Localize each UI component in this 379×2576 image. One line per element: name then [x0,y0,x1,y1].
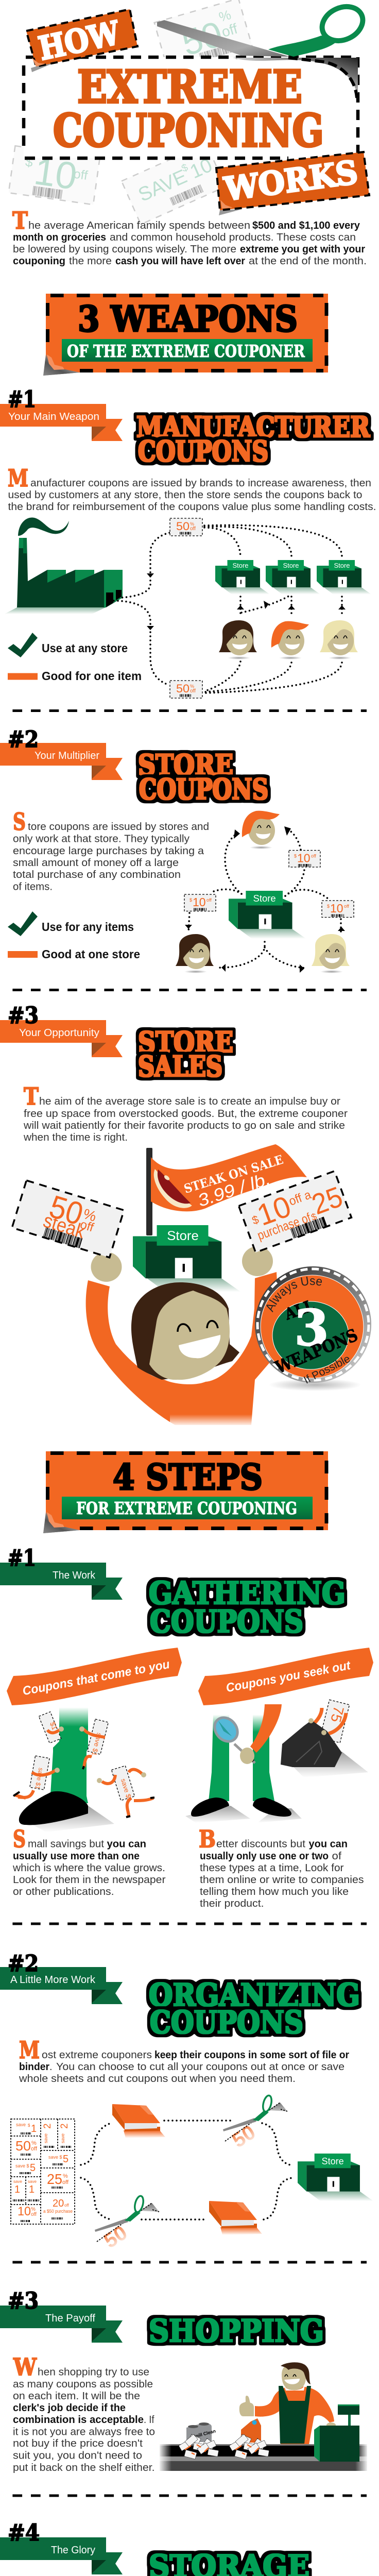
faint coupon: $10 off: off [73,167,89,183]
faint coupon: $10 off: 10 [31,149,79,198]
coupon: $10 off right: $ [327,904,330,909]
feature: use at any store [8,633,128,657]
text: organizing: . [49,2061,53,2073]
head [131,1282,239,1380]
coupon sheet: 1 [29,2184,35,2195]
coupon sheet: 5 [63,2154,68,2165]
coupon: 50% off bottom: 50 [176,682,190,695]
heading: manufacturer coupons: COUPONS [138,434,268,468]
flag: steak on sale [151,1144,307,1211]
diagram: organizing flow [81,2095,373,2253]
coupon: 50% off top: % [190,521,194,527]
coupon: $10 off: off [311,853,316,858]
coupon sheet: % [31,2207,36,2212]
text: shopping: not buy if the price doesn't [13,2438,143,2449]
clerk [239,2362,336,2445]
coupon sheet: 5 [30,2162,36,2174]
text: store coupons: encourage large purchases by taking a [13,845,204,857]
carton and coupons [229,2418,269,2459]
store: Store [167,1229,199,1243]
intro text: cash you will have left over [115,256,245,267]
text: better discounts: of [332,1851,341,1862]
text: manufacturer coupons [8,464,376,513]
coupon sheet: off [64,2203,70,2208]
heading: organizing coupons: ORGANIZING [149,1977,360,2013]
coupon sheet: 50 [15,2138,31,2154]
store 1 [215,560,270,595]
text: manufacturer coupons: M [8,464,28,492]
title panel: dashed coupon [24,57,358,158]
store: Store [253,893,276,904]
coupon runners [13,1711,154,1817]
coupon sheet: a $50 purchase [43,2209,73,2214]
coupon sheet: $ [28,2123,30,2128]
coupon sheet: save $ [15,2163,29,2168]
coupon: $10 off left: 10 [193,895,206,909]
coupon: $10 off left: $ [190,897,192,903]
ribbon: #1 the work [0,1545,123,1600]
title: COUPONING: COUPONING [53,104,324,157]
ribbon: #2 a little more work: A Little More Work [10,1974,96,1986]
banner: coupons you seek out: Coupons you seek out [225,1658,352,1695]
banner: 3 weapons: 3 WEAPONS [78,299,298,340]
text: manufacturer coupons: used by customers at any store, then the store sends the coupons back to [8,489,363,501]
coupon sheet: 10 [18,2205,31,2218]
text: store sales: will wait patiently for their favorite products to go on sale and strike [23,1120,345,1131]
coupon: 50% off bottom: % [190,684,194,689]
coupon: $10 off left: off [206,897,212,903]
coupon sheet: save [16,2122,26,2127]
coupon: $10 off [289,850,320,867]
title tag: WORKS: WORKS [222,154,360,208]
text: organizing: binder [19,2061,49,2073]
diagram: store coupon flow [176,811,354,973]
text: store coupons: total purchase of any combination [13,869,181,880]
text: better discounts: etter discounts but [216,1838,305,1850]
text: store sales [23,1082,348,1143]
text: small savings: Look for them in the newspaper [13,1874,166,1886]
text: organizing: You can choose to cut all your coupons out at once or save [56,2061,344,2073]
illustration: couponer with store and sale flag [11,1144,371,1425]
coupon sheet: 2 [42,2123,53,2129]
heading: store coupons: COUPONS [139,772,268,806]
banner: coupons that come to you [7,1648,182,1705]
faint coupon: $10 off [9,146,100,205]
text: small savings: usually use more than one [13,1851,140,1862]
text: shopping: on each item. It will be the [13,2391,140,2402]
coupon: 50% off steak: steak [41,1210,88,1243]
coupon sheet: 25 [47,2171,62,2187]
coupon: 50% off top: 50 [176,520,190,533]
shopper faces [219,620,358,659]
coupon sheet: save [60,2133,65,2143]
text: store coupons: of items. [13,881,53,892]
ribbon: #2 a little more work: #2 [8,1951,39,1977]
text: shopping: clerk's job decide if the [13,2402,126,2414]
banner: 4 steps: 4 STEPS [113,1457,263,1498]
conveyor [159,2444,368,2471]
icon: scissors cutting coupon [223,2095,287,2153]
icon: binder lower [209,2201,262,2235]
text: small savings: you can [107,1838,146,1850]
text: shopping: W [13,2353,37,2381]
flag: steak on sale: STEAK ON SALE [182,1152,285,1196]
coupon: $10 off right: 10 [330,902,343,915]
coupon: $10 off a purchase of $25: $ [310,1211,318,1223]
coupon sheet: off [31,2146,38,2152]
faint coupon: 50% off [154,0,254,76]
banner: coupons that come to you: Coupons that come to you [22,1657,171,1698]
intro text: extreme you get with your [240,244,365,255]
text: better discounts: you can [309,1838,348,1850]
badge: always use all 3 weapons if possible: Always Use [266,1277,322,1313]
text: manufacturer coupons: anufacturer coupons are issued by brands to increase awareness, then [30,478,371,489]
store: Store [322,2156,344,2166]
intro text: month on groceries [13,232,106,243]
feature: use at any store: Use at any store [42,641,128,655]
coupon sheet: save [43,2133,48,2143]
coupon: 50% off steak: 50 [45,1189,87,1232]
text: better discounts: these types at a time, Look for [200,1862,344,1874]
illustration: cashier at checkout [159,2362,368,2471]
text: store sales: when the time is right. [23,1132,128,1143]
coupon: $10 off a purchase of $25 [239,1171,351,1252]
coupon: $10 off a purchase of $25: purchase of [255,1210,313,1243]
intro text [12,207,367,267]
coupon: 50% off steak [12,1180,124,1258]
text: small savings: or other publications. [13,1886,114,1897]
banner: 3 weapons: OF THE EXTREME COUPONER [67,341,305,361]
ribbon: #4 the glory [0,2520,123,2574]
heading: gathering coupons: COUPONS [150,1604,303,1640]
ribbon: #1 your main weapon [0,386,123,441]
intro text: couponing [13,256,65,267]
heading: gathering coupons [149,1575,346,1640]
icon: binder [112,2104,165,2138]
coupon sheet [11,2119,75,2224]
text: better discounts: telling them how much you like [200,1886,349,1897]
text: better discounts: usually only use one or two [200,1851,329,1862]
coupon: $10 off a purchase of $25: off a [287,1188,313,1209]
ribbon: #2 your multiplier: #2 [8,726,39,753]
coupon sheet: % [63,2173,68,2179]
intro text: T [12,207,28,234]
flag: steak on sale: 3.99 / lb. [195,1169,273,1211]
text: organizing: keep their coupons in some sort of file or [154,2049,349,2061]
text: shopping: combination is acceptable [13,2414,144,2426]
coupon sheet: save $ [48,2155,62,2160]
store 3 [317,560,371,595]
illustration: coupons come to you [13,1707,154,1832]
magnifier and arm [210,1704,282,1765]
feature: good for one item: Good for one item [42,669,142,683]
text: small savings: which is where the value grows. [12,1862,165,1874]
coupon: 50% off steak: % [81,1206,98,1225]
text: better discounts: B [199,1825,216,1853]
coupon runners: $1 [48,1721,59,1731]
coupon: $10 off left [184,894,216,911]
text: store coupons: small amount of money off a large [13,857,179,869]
rock and hidden coupon [281,1700,368,1777]
coupon: 50% off top: off [190,526,196,532]
text: small savings: mall savings but [28,1838,104,1850]
ribbon: #1 your main weapon: Your Main Weapon [8,411,99,422]
ribbon: #3 the payoff: The Payoff [45,2313,95,2324]
badge: always use all 3 weapons if possible: 3 [295,1299,329,1357]
text: better discounts: them online or write to companies [200,1874,364,1886]
text: shopping: it is not you are always free to [13,2426,155,2437]
text: small savings: S [13,1825,26,1853]
ribbon: #4 the glory: The Glory [51,2545,95,2556]
heading: store sales [138,1025,233,1083]
coupon: 50% off top [170,518,202,536]
coupon sheet: 1 [14,2184,20,2195]
badge: always use all 3 weapons if possible [255,1266,371,1390]
coupon: $10 off: $ [294,853,297,858]
intro text: the more [69,256,112,267]
coupon: $10 off a purchase of $25: $ [250,1213,261,1227]
coupon: $10 off a purchase of $25: 10 [253,1190,296,1232]
title tag: HOW: HOW [36,14,124,67]
store [298,2154,373,2201]
icon: scissors cutting coupon lower [95,2195,159,2253]
heading: gathering coupons: GATHERING [149,1575,346,1612]
coupon sheet: save [13,2179,22,2184]
intro text: he average American family spends between [28,220,250,231]
paper towels and coupons [179,2422,219,2459]
banner: coupons you seek out [198,1648,373,1705]
ribbon: #1 the work: #1 [8,1545,36,1571]
text: store sales: he aim of the average store sale is to create an impulse buy or [39,1096,340,1107]
text: shopping: as many coupons as possible [13,2379,153,2390]
faint coupon: save $10 [122,143,226,225]
faint coupon: save $10: SAVE [135,166,191,206]
hands [91,1252,122,1282]
text: shopping [13,2353,155,2473]
text: shopping: suit you, you don't need to [13,2450,142,2462]
text: organizing [19,2036,349,2084]
ribbon: #3 your opportunity: #3 [8,1003,39,1029]
text: store sales: T [24,1082,39,1110]
heading: organizing coupons [149,1977,360,2041]
coupon sheet: % [31,2140,37,2146]
coupon runners: save $1 [119,1777,134,1802]
store 2: Store [283,562,299,569]
text: organizing: ost extreme couponers [42,2049,152,2061]
store 3: Store [334,562,350,569]
ribbon: #2 your multiplier: Your Multiplier [35,750,99,761]
body and arms [86,1272,281,1425]
text: store coupons: S [13,808,26,836]
illustration: coupons you seek out [185,1700,368,1823]
text: store coupons [13,808,209,892]
intro text: be lowered by using coupons wisely. The more [13,244,236,255]
coupon: 50% off bottom [170,681,202,698]
title: EXTREME: EXTREME [77,60,302,113]
feature: good at one store: Good at one store [42,947,140,961]
faint coupon: 50% off: 50 [177,13,227,63]
banner: 4 steps: FOR EXTREME COUPONING [76,1498,297,1518]
ribbon: #1 your main weapon: #1 [8,386,36,413]
flag pole [146,1148,152,1235]
cash register [314,2404,359,2462]
text: shopping: hen shopping try to use [38,2367,149,2378]
coupon runners: save $1 [90,1732,104,1757]
text: shopping: put it back on the shelf either. [13,2462,154,2473]
ribbon: #3 the payoff [0,2288,123,2343]
rock and hidden coupon: 75 [328,1705,347,1724]
heading: manufacturer coupons [136,410,370,468]
diagram: manufacturer coupon flow [114,518,371,698]
intro text: at the end of the month. [249,256,367,267]
feature: use for any items [8,911,134,936]
faint coupon: 50% off: % [217,7,233,25]
text: better discounts [199,1825,364,1909]
text: store coupons: tore coupons are issued by stores and [28,821,209,833]
coupon: 50% off bottom: off [190,688,196,694]
coupon: $10 off right [322,901,354,917]
heading: store sales: SALES [138,1049,222,1083]
ribbon: #1 the work: The Work [53,1570,96,1581]
heading: store coupons [138,748,268,806]
text: shopping: . If [144,2414,154,2426]
feature: use for any items: Use for any items [42,920,134,934]
heading: shopping: SHOPPING [149,2313,324,2349]
coupon sheet: 1 [31,2123,37,2134]
coupon: $10 off: 10 [297,851,311,865]
coupon sheet: off [31,2212,37,2217]
coupon: 50% off steak: off [78,1217,96,1235]
faint coupon: save $10: $ [180,162,190,175]
heading: organizing coupons: COUPONS [150,2005,303,2041]
text: organizing: M [19,2036,40,2064]
banner: 3 weapons [43,294,328,376]
ribbon: #2 your multiplier [0,726,123,780]
text: store sales: free up space from overstocked goods. But, the extreme couponer [24,1108,348,1120]
coupon sheet: 2 [59,2123,70,2129]
icon: factory [4,517,123,614]
badge: always use all 3 weapons if possible: WEAPONS [272,1325,360,1378]
badge: always use all 3 weapons if possible: ALL [282,1297,317,1324]
coupon sheet: save [28,2179,37,2184]
store 1: Store [232,562,249,569]
intro text: and common household products. These costs can [110,232,356,243]
text: manufacturer coupons: the brand for reimbursement of the coupons value plus some handling costs. [8,501,376,513]
icon: scissors [157,1,368,57]
faces [176,811,350,973]
ribbon: #3 the payoff: #3 [8,2288,39,2314]
text: small savings [12,1825,166,1897]
ribbon: #3 your opportunity: Your Opportunity [19,1027,99,1039]
paper towels and coupons: Spill Clean [192,2428,216,2439]
faint coupon: 50% off: off [220,21,239,40]
coupon sheet: off [62,2179,69,2185]
badge: always use all 3 weapons if possible: If Possible [302,1353,352,1386]
coupon: $10 off right: off [344,904,349,909]
store [133,1225,241,1292]
store [229,891,306,939]
banner: 4 steps [43,1451,328,1533]
ribbon: #3 your opportunity [0,1003,123,1057]
store 2 [266,560,320,595]
intro text: $500 and $1,100 every [252,220,360,231]
ribbon: #4 the glory: #4 [8,2520,40,2546]
text: store coupons: only work at that store. They typically [13,834,190,845]
heading: store sales: STORE [138,1025,233,1059]
ribbon: #2 a little more work [0,1951,123,2004]
heading: store coupons: STORE [138,748,233,782]
faint coupon: save $10: 10 [187,155,216,183]
coupon runners: save $1 [33,1767,45,1790]
text: organizing: whole sheets and cut coupons out when you need them. [19,2073,296,2084]
coupon sheet: 20 [53,2198,64,2209]
faint coupon: $10 off: $ [24,154,34,170]
text: better discounts: their product. [200,1898,264,1909]
coupon: $10 off a purchase of $25: 25 [307,1180,347,1221]
